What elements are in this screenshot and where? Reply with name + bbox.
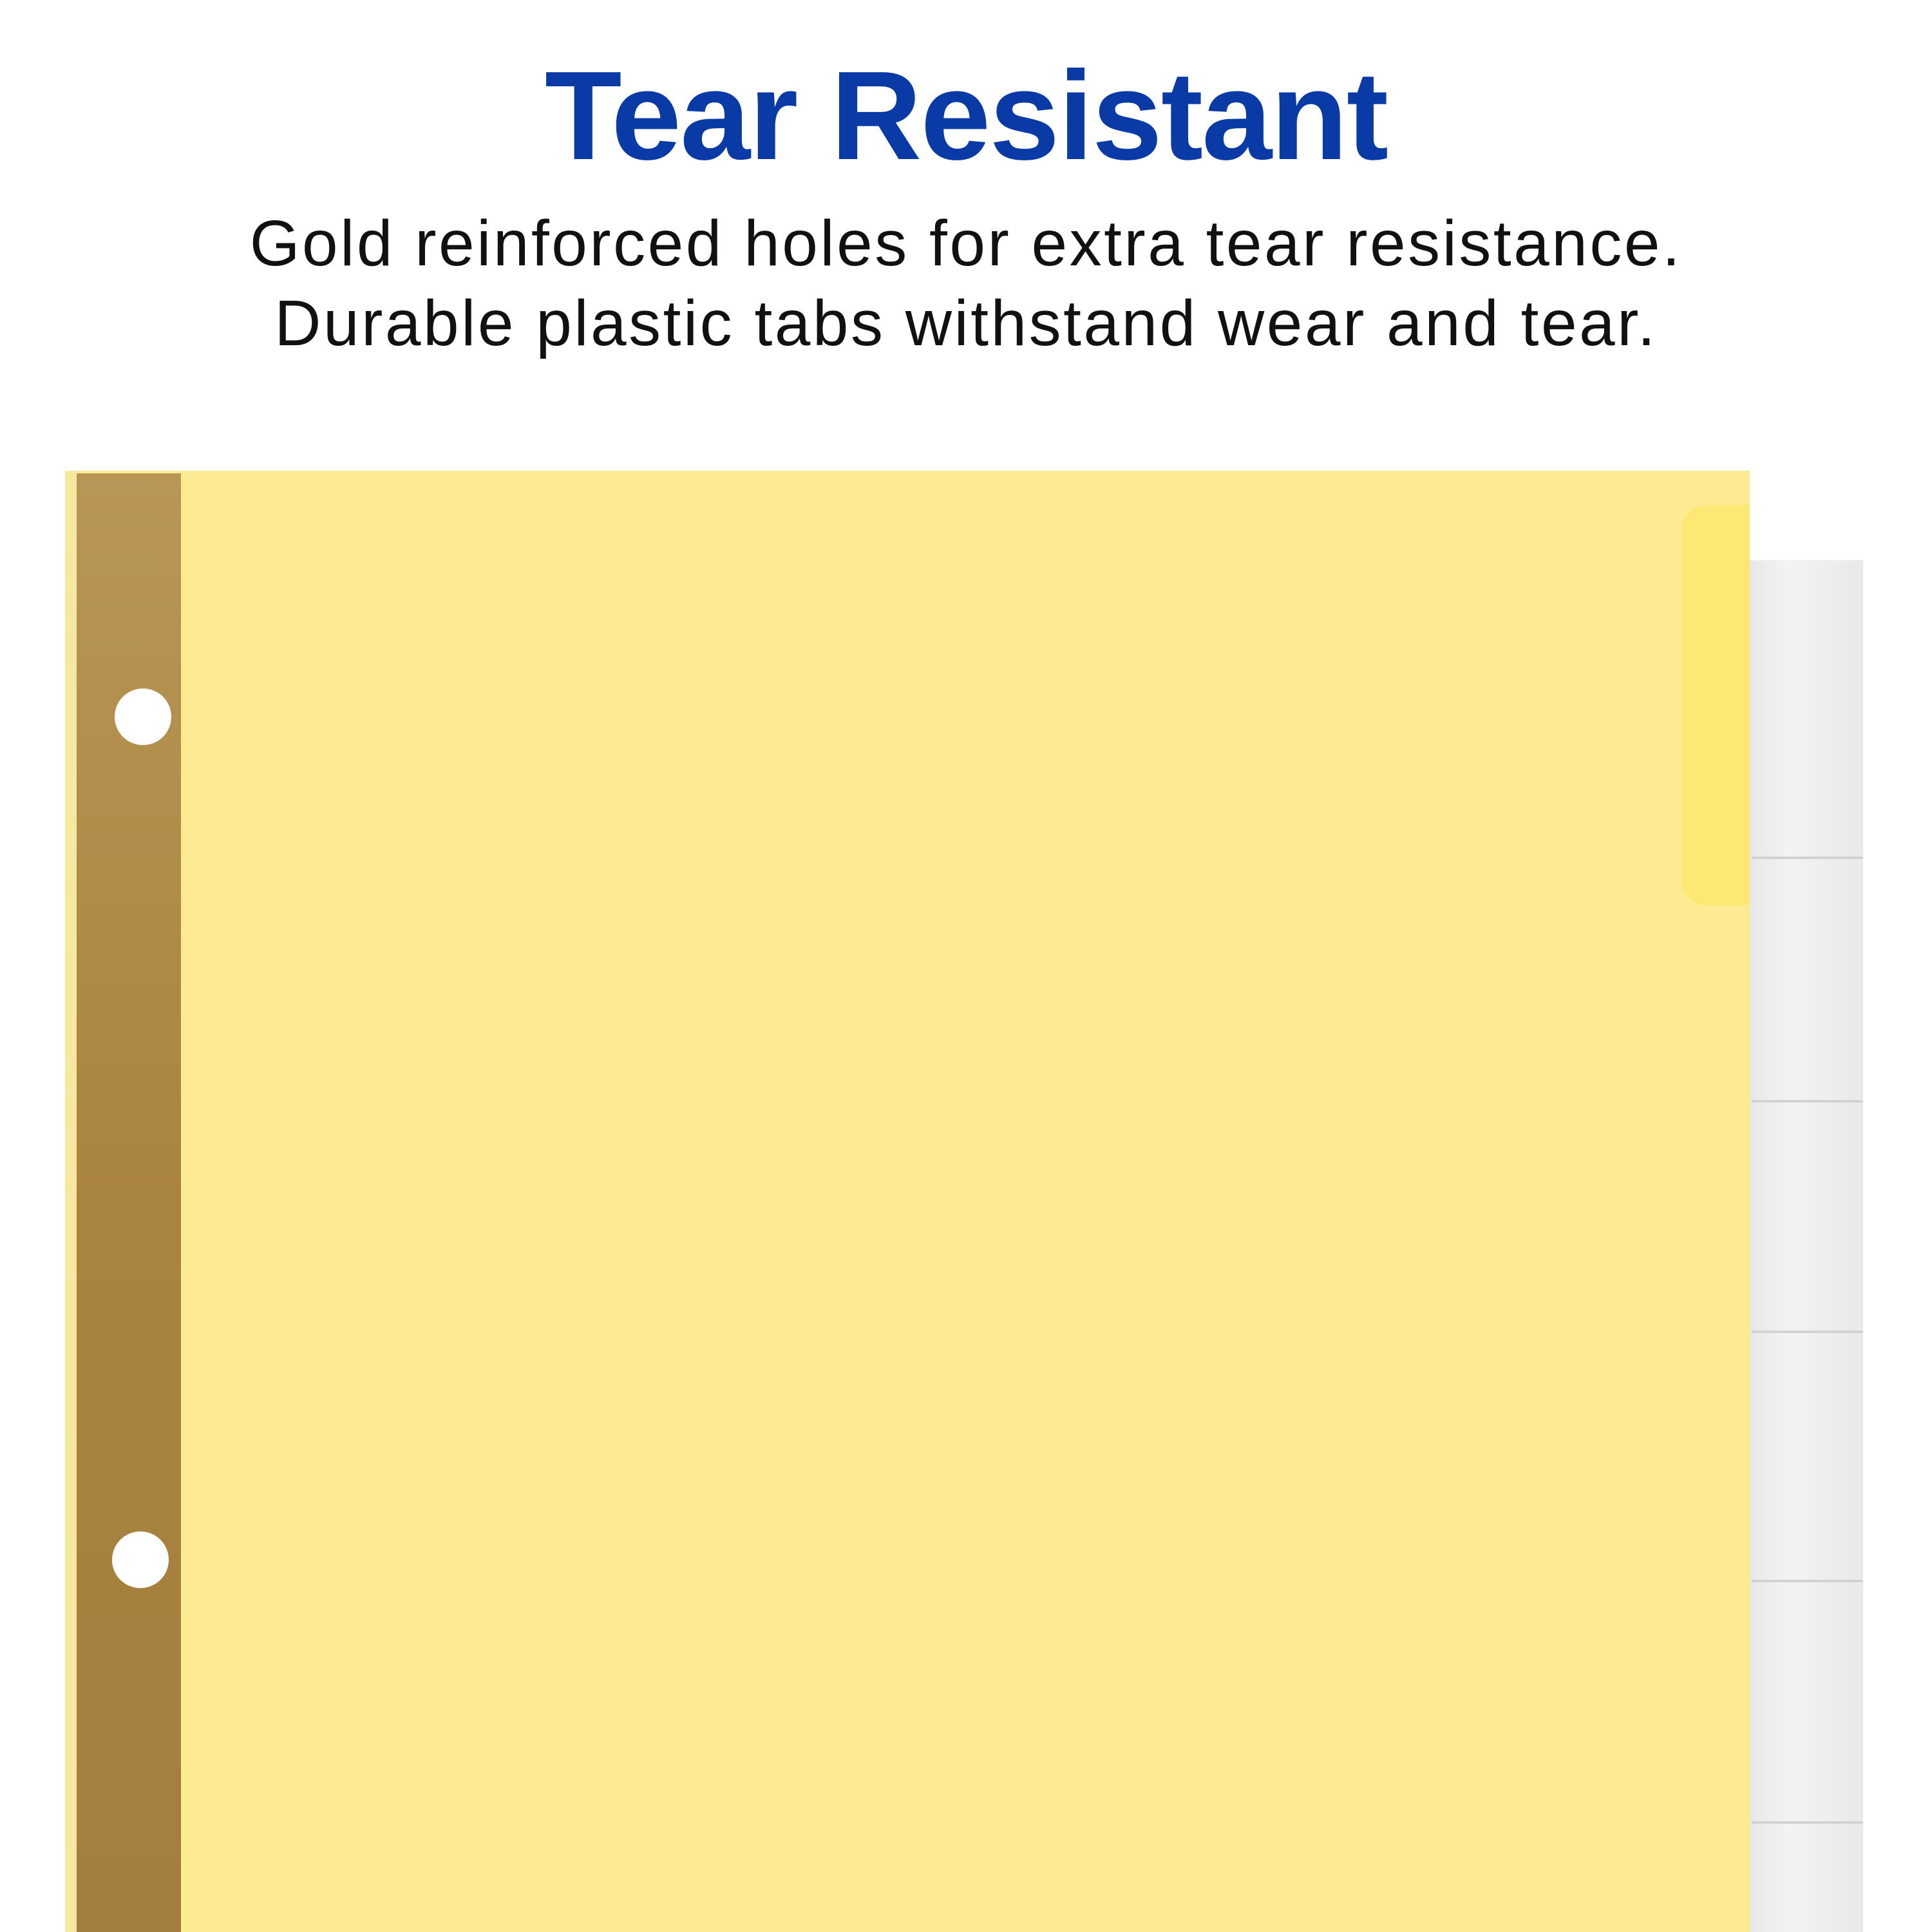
hole top [115,688,171,745]
clear plastic tabs [1739,560,1863,1932]
left edge strip [65,471,77,1932]
subtitle text block [250,207,1682,359]
subtitle text block: Gold reinforced holes for extra tear resistance. [250,207,1682,279]
subtitle text block: Durable plastic tabs withstand wear and tear. [274,287,1658,359]
yellow divider sheet [65,471,1750,1932]
yellow tab on sheet [1681,505,1750,905]
hole bottom [112,1531,169,1588]
title: Tear Resistant [545,45,1387,186]
gold reinforced strip [77,473,181,1932]
